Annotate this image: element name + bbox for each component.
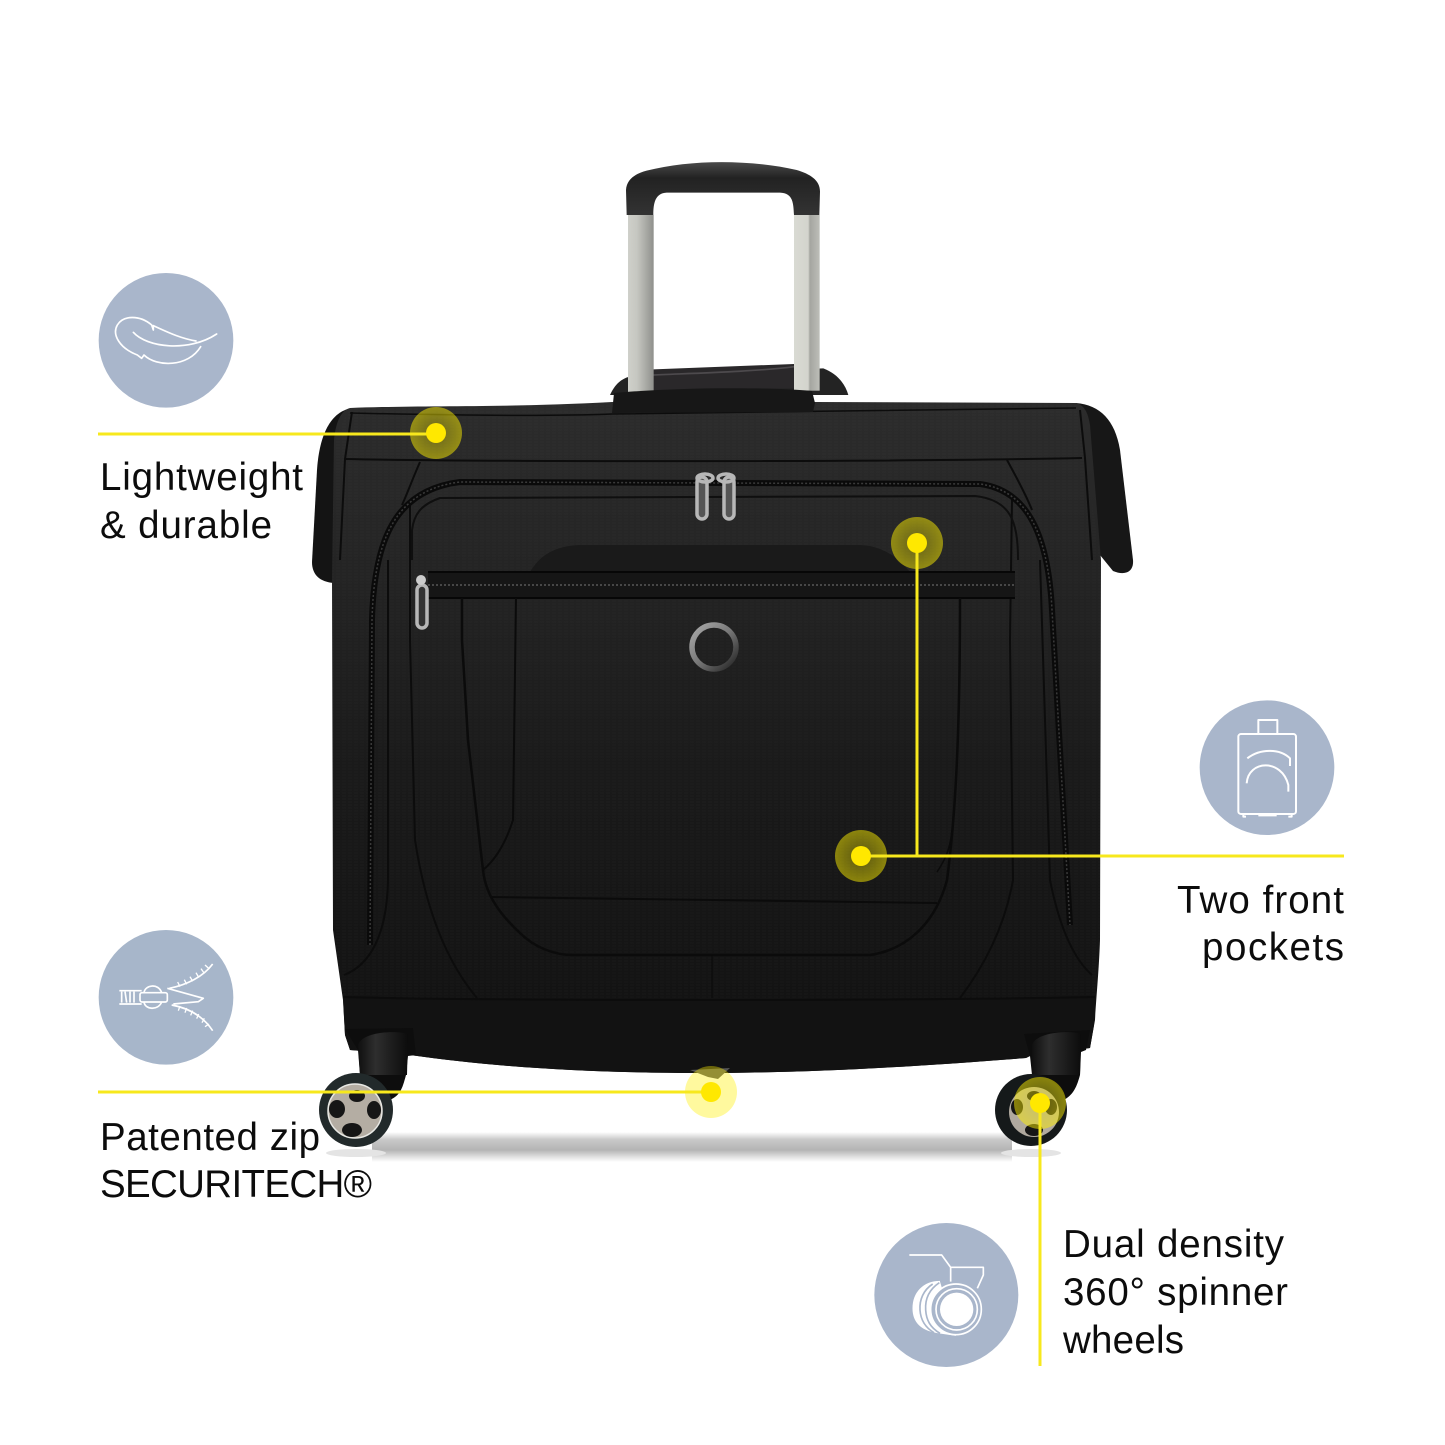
icon: zipper [99, 930, 233, 1065]
icon: spinner wheel [874, 1223, 1018, 1367]
main body [332, 402, 1101, 1073]
suitcase product photo [312, 162, 1133, 1147]
ground shadow [326, 1132, 1061, 1162]
main zip [370, 482, 1070, 945]
handle base patch [612, 388, 815, 413]
icon: suitcase [1200, 700, 1334, 835]
callout: two front pockets [835, 517, 1344, 969]
logo ring [692, 625, 736, 669]
front pocket zip [428, 545, 1015, 598]
callout: spinner wheels: wheels [1062, 1319, 1184, 1362]
seams and panels [340, 408, 1095, 1000]
callout: spinner wheels [1014, 1077, 1288, 1366]
inner pocket panel [462, 598, 960, 998]
callout: lightweight and durable: Lightweight [100, 456, 303, 499]
callout: two front pockets: Two front [1177, 879, 1344, 922]
callout: spinner wheels: Dual density [1063, 1223, 1285, 1266]
callout: patented zip: Patented zip [100, 1116, 320, 1159]
left side flap [312, 408, 352, 583]
callout: lightweight and durable: & durable [100, 504, 272, 547]
callout: patented zip [98, 1066, 737, 1206]
bottom zip pull [690, 1068, 730, 1079]
callout: two front pockets: pockets [1202, 926, 1344, 969]
callout: spinner wheels: 360° spinner [1063, 1271, 1288, 1314]
callout: lightweight and durable [98, 407, 462, 547]
right side flap [1076, 403, 1133, 573]
left wheel [319, 1028, 416, 1147]
telescopic handle [610, 162, 848, 395]
icon: feather [99, 273, 233, 408]
bottom band [343, 997, 1095, 1073]
right wheel [995, 1030, 1090, 1146]
zip pulls [416, 474, 734, 628]
callout: patented zip: SECURITECH® [100, 1163, 372, 1206]
